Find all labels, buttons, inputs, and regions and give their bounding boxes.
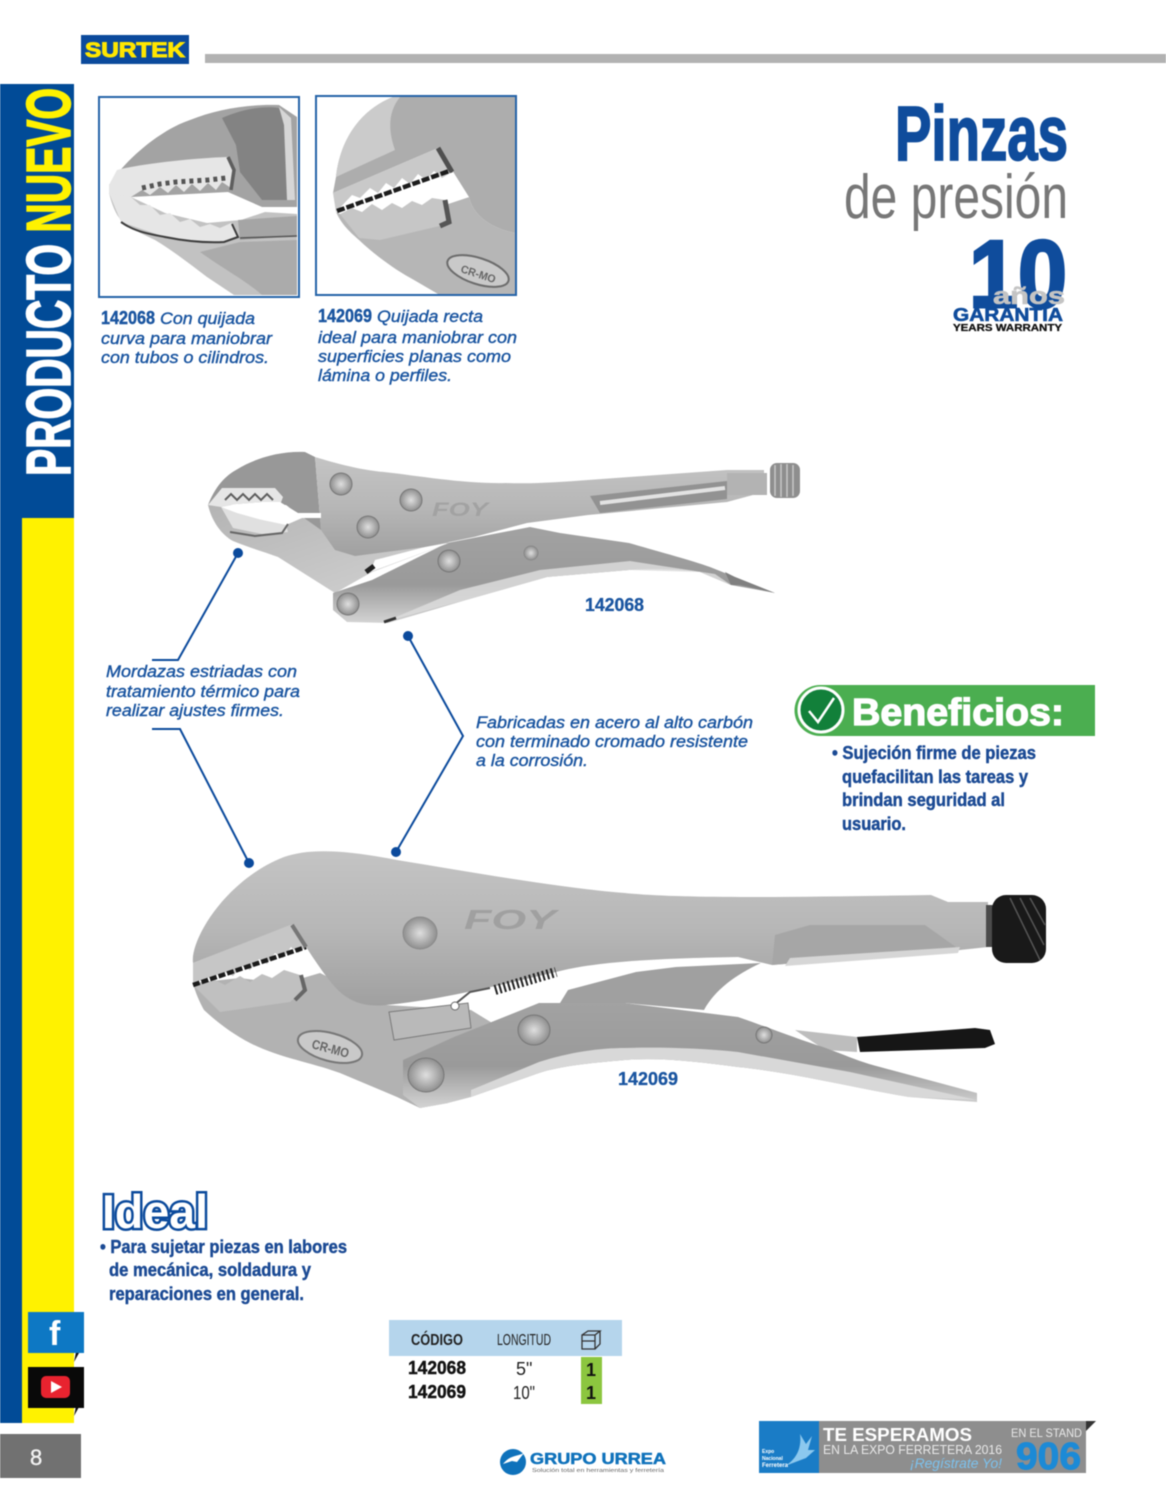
- callout: serrated jaws: [106, 548, 300, 868]
- callout: high carbon steel: con terminado cromado resistente: [476, 732, 748, 751]
- benefits text: • Sujeción firme de piezas: [832, 743, 1036, 763]
- banner: Expo Ferretera stand 906: Expo: [762, 1449, 774, 1455]
- warranty badge: 10 años: YEARS WARRANTY: [953, 323, 1062, 334]
- callout: high carbon steel: [391, 631, 753, 857]
- title: Pinzas de presión: de presión: [844, 163, 1068, 232]
- caption: 142068 curved jaw: Con quijada: [160, 309, 255, 328]
- banner: Expo Ferretera stand 906: Ferretera: [762, 1463, 789, 1469]
- social icon: Facebook: [28, 1312, 84, 1362]
- product label: 142068: 142068: [585, 595, 644, 615]
- warranty badge: 10 años: 10: [969, 221, 1067, 328]
- benefits panel: [795, 685, 1095, 834]
- caption: 142069 straight jaw: ideal para maniobrar con: [318, 328, 517, 347]
- banner: Expo Ferretera stand 906: 906: [1016, 1436, 1081, 1478]
- table header: CÓDIGO: [411, 1330, 463, 1349]
- banner: Expo Ferretera stand 906: Nacional: [762, 1456, 783, 1462]
- product illustration: pliers 142069: FOY: [464, 904, 560, 935]
- table row: 142068: 142068: [408, 1358, 466, 1378]
- banner: Expo Ferretera stand 906: EN LA EXPO FERRETERA 2016: [823, 1442, 1002, 1457]
- table row: 142069: 1: [586, 1383, 596, 1403]
- logo: Grupo Urrea: [500, 1449, 666, 1475]
- caption: 142069 straight jaw: [318, 306, 517, 385]
- table row: 142068: [408, 1358, 596, 1380]
- callout: high carbon steel: a la corrosión.: [476, 751, 588, 770]
- callout: serrated jaws: tratamiento térmico para: [106, 682, 300, 701]
- social icon: Facebook: f: [49, 1315, 61, 1353]
- ideal-use text: reparaciones en general.: [109, 1284, 304, 1304]
- spec table: [389, 1320, 622, 1404]
- callout: serrated jaws: Mordazas estriadas con: [106, 662, 297, 681]
- ideal-use text: • Para sujetar piezas en labores: [100, 1237, 347, 1257]
- benefits text: [832, 743, 1036, 834]
- caption: 142069 straight jaw: Quijada recta: [377, 307, 483, 326]
- product illustration: pliers 142068: FOY: [432, 500, 491, 521]
- warranty badge: 10 años: años: [993, 283, 1065, 310]
- benefits text: brindan seguridad al: [842, 790, 1005, 810]
- table header: [389, 1320, 622, 1356]
- warranty badge: 10 años: GARANTIA: [953, 305, 1063, 325]
- left sidebar: PRODUCTO NUEVO: PRODUCTO NUEVO: [15, 88, 84, 476]
- product illustration: pliers 142069: [193, 851, 1046, 1108]
- page number: 8: [30, 1445, 42, 1470]
- benefits text: usuario.: [842, 814, 906, 834]
- ideal-use panel: [100, 1185, 347, 1304]
- table header: LONGITUD: [497, 1332, 551, 1349]
- ideal-use text: de mecánica, soldadura y: [109, 1260, 311, 1280]
- heading: Ideal: Ideal: [102, 1185, 208, 1238]
- table row: 142069: 142069: [408, 1382, 466, 1402]
- banner: Expo Ferretera stand 906: ¡Regístrate Yo!: [910, 1455, 1002, 1471]
- close-up photo: straight jaw 142069: [316, 96, 516, 295]
- table row: 142069: 10": [513, 1383, 535, 1403]
- callout: serrated jaws: realizar ajustes firmes.: [106, 701, 284, 720]
- caption: 142068 curved jaw: con tubos o cilindros.: [101, 348, 269, 367]
- caption: 142068 curved jaw: curva para maniobrar: [101, 329, 273, 348]
- benefits heading bar: [795, 685, 1095, 736]
- social icon: YouTube: [28, 1367, 84, 1416]
- caption: 142069 straight jaw: superficies planas como: [318, 347, 511, 366]
- benefits heading bar: Beneficios:: [852, 692, 1064, 734]
- caption: 142068 curved jaw: 142068: [101, 308, 155, 328]
- header brand logo: SURTEK: SURTEK: [85, 39, 185, 62]
- header brand logo: SURTEK: [81, 35, 189, 64]
- banner: Expo Ferretera stand 906: EN EL STAND: [1011, 1426, 1082, 1440]
- logo: Grupo Urrea: GRUPO URREA: [530, 1451, 666, 1468]
- table row: 142068: 5": [516, 1359, 532, 1379]
- product label: 142069: 142069: [618, 1069, 678, 1089]
- title: Pinzas de presión: Pinzas: [895, 91, 1068, 177]
- caption: 142068 curved jaw: [101, 308, 273, 367]
- close-up photo: straight jaw 142069: CR-MO: [459, 263, 497, 286]
- table row: 142068: 1: [586, 1360, 596, 1380]
- page number: [0, 1434, 81, 1478]
- product illustration: pliers 142069: CR-MO: [310, 1036, 351, 1061]
- close-up photo: curved jaw 142068: [99, 97, 299, 297]
- title: Pinzas de presión: [844, 91, 1068, 232]
- left sidebar: PRODUCTO NUEVO: [0, 84, 84, 1423]
- banner: Expo Ferretera stand 906: [759, 1421, 1096, 1478]
- banner: Expo Ferretera stand 906: TE ESPERAMOS: [823, 1425, 972, 1445]
- table row: 142069: [408, 1382, 596, 1403]
- callout: high carbon steel: Fabricadas en acero al alto carbón: [476, 713, 753, 732]
- product illustration: pliers 142068: [208, 452, 800, 623]
- caption: 142069 straight jaw: lámina o perfiles.: [318, 366, 452, 385]
- caption: 142069 straight jaw: 142069: [318, 306, 372, 326]
- logo: Grupo Urrea: Solución total en herramientas y ferretería: [532, 1468, 664, 1474]
- benefits text: quefacilitan las tareas y: [842, 767, 1028, 787]
- ideal-use text: [100, 1237, 347, 1304]
